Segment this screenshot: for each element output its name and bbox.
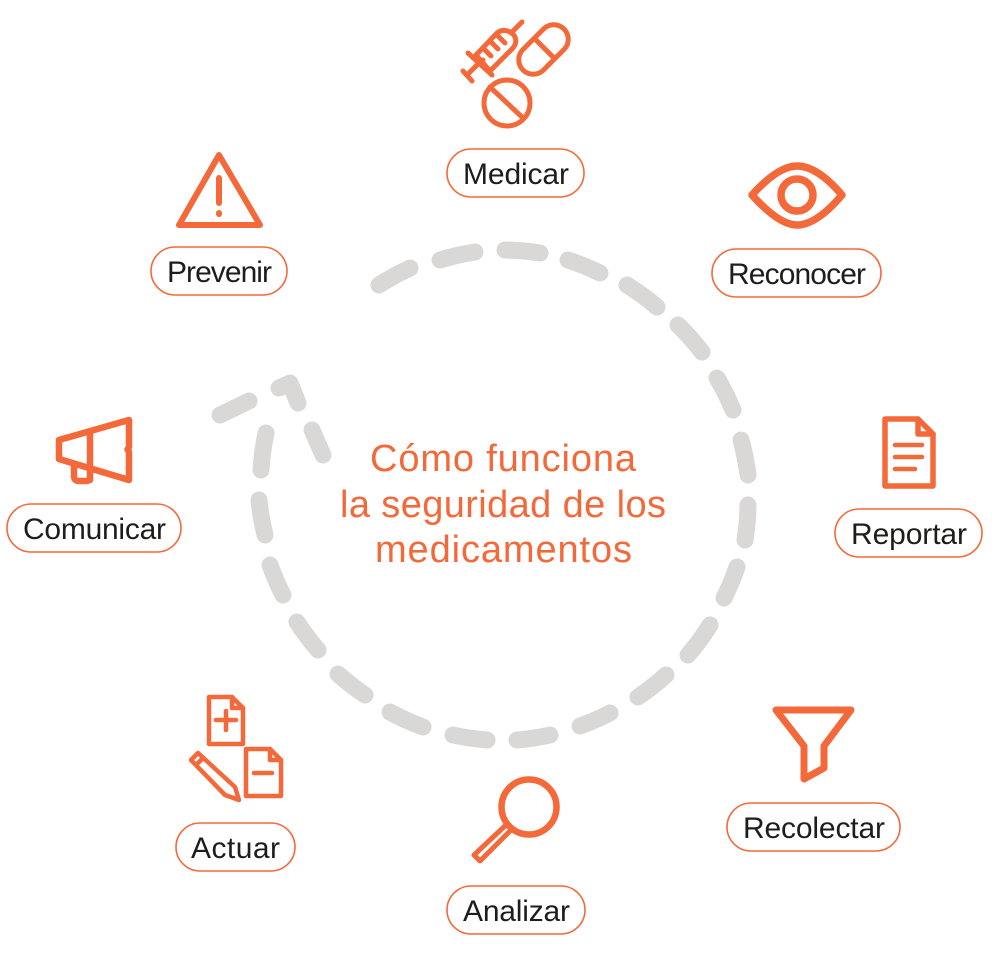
label: Prevenir (151, 247, 287, 295)
title: Cómo funciona (370, 438, 637, 480)
label: Recolectar (727, 803, 900, 851)
label: Reconocer: Reconocer (728, 258, 866, 291)
title (340, 438, 666, 571)
icon: funnel (776, 710, 851, 779)
circular dashed arrow (220, 250, 748, 740)
label: Actuar (176, 823, 295, 871)
title: medicamentos (375, 529, 632, 571)
icon: syringe, capsule and tablet (463, 19, 574, 126)
label: Comunicar (7, 504, 181, 552)
label: Reconocer (712, 249, 881, 297)
icon: report document (885, 419, 933, 486)
label: Prevenir: Prevenir (167, 256, 272, 289)
label: Comunicar: Comunicar (23, 513, 166, 546)
label: Actuar: Actuar (191, 832, 280, 865)
label: Analizar: Analizar (463, 895, 570, 928)
label: Reportar (835, 509, 982, 557)
label: Analizar (447, 886, 585, 934)
icon: eye (752, 166, 842, 225)
icon: magnifying glass (474, 780, 556, 861)
label: Medicar (447, 149, 584, 197)
label: Medicar: Medicar (463, 158, 569, 191)
icon: warning triangle (179, 155, 260, 225)
label: Recolectar: Recolectar (743, 812, 885, 845)
icon: documents and pencil (191, 697, 281, 800)
title: la seguridad de los (340, 484, 666, 526)
icon: megaphone (59, 420, 129, 481)
label: Reportar: Reportar (851, 518, 967, 551)
